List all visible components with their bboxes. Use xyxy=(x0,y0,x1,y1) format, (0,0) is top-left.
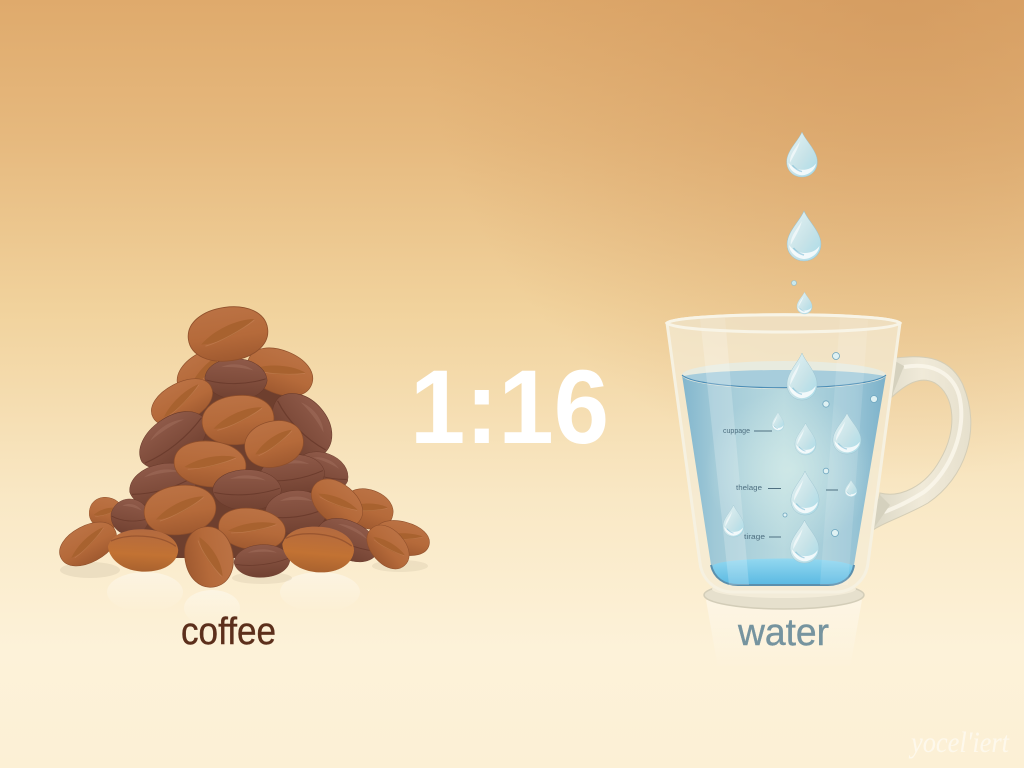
glass rim xyxy=(667,315,900,332)
drops in water xyxy=(723,353,861,563)
water glow xyxy=(705,390,875,550)
icon: coffee bean pile xyxy=(53,302,433,591)
icon: glass mug xyxy=(667,315,900,592)
glass body xyxy=(667,315,900,592)
falling drop 3 xyxy=(797,292,812,314)
water bottom edge xyxy=(711,565,854,585)
measurement marks: tirage xyxy=(744,534,765,541)
pile shadow backing xyxy=(125,360,365,558)
measurement marks: thelage xyxy=(736,485,762,492)
measurement marks xyxy=(723,428,838,541)
surface ripple xyxy=(684,370,884,388)
label: coffee: coffee xyxy=(181,611,276,653)
water surface xyxy=(682,361,886,389)
bean reflections xyxy=(60,560,428,626)
icon: mug handle xyxy=(873,357,971,530)
ratio number: 1:16 xyxy=(410,349,609,466)
cup base xyxy=(704,580,864,609)
water body xyxy=(682,375,886,585)
surface edge line xyxy=(682,375,886,388)
watermark: yocel'iert xyxy=(908,726,1010,759)
glass light streaks xyxy=(700,318,868,585)
water bottom pool xyxy=(712,558,853,585)
falling drop 2 xyxy=(787,211,821,261)
cup saucer reflection xyxy=(706,600,862,668)
tiny falling droplet xyxy=(792,280,796,286)
label: water: water xyxy=(737,612,829,654)
bubbles xyxy=(783,352,878,536)
falling drop 1 xyxy=(787,132,817,177)
measurement marks: cuppage xyxy=(723,428,750,435)
